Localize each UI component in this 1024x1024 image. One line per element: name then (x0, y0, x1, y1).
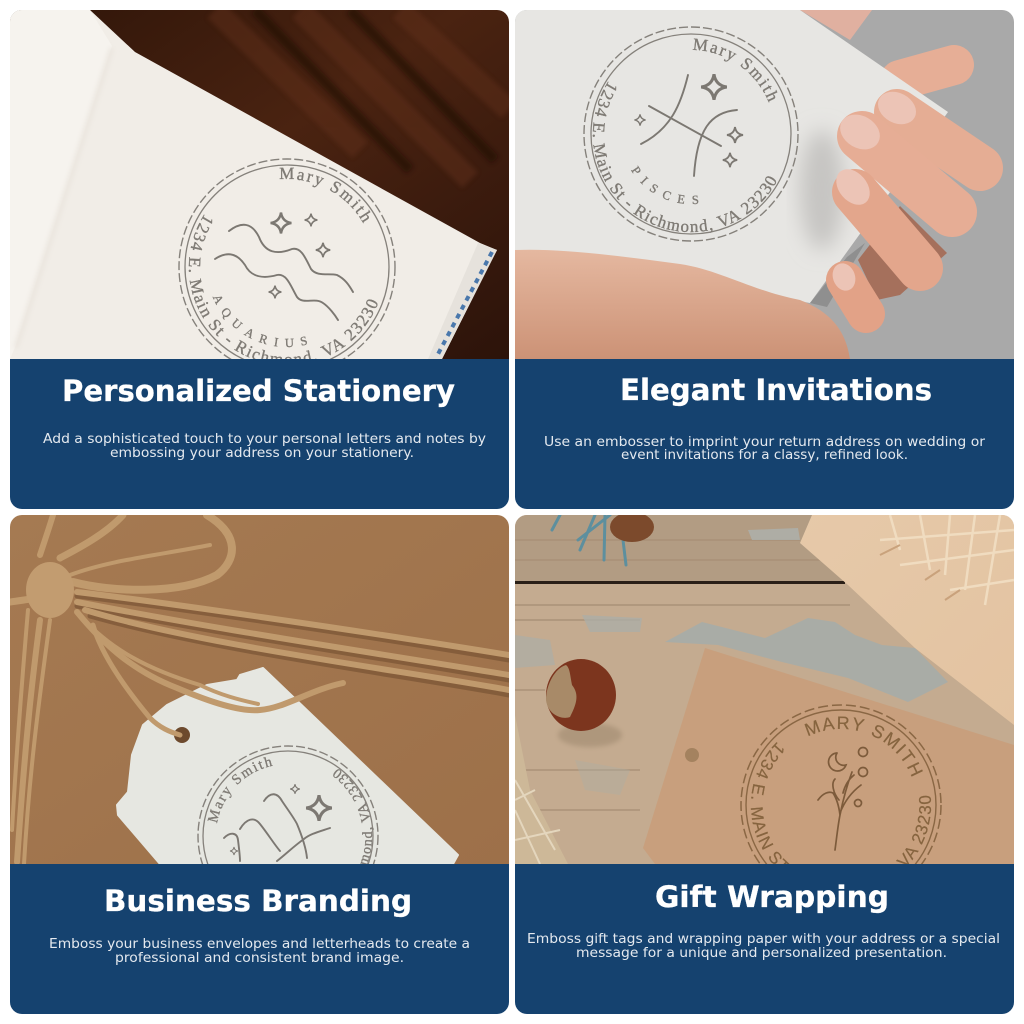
description: embossing your address on your stationery. (110, 446, 414, 461)
panel: gift wrapping (515, 515, 1014, 1014)
stamp: pisces: Mary Smith (692, 38, 778, 102)
stamp: floral: 1234 E. MAIN ST - RICHMOND, VA 23230 (750, 742, 932, 864)
description (43, 432, 486, 461)
photo: twine-tied kraft envelope with white tag (10, 515, 509, 864)
stamp: aquarius: Mary Smith (280, 168, 370, 224)
stamp: virgo (197, 745, 379, 864)
description: Emboss gift tags and wrapping paper with your address or a special (527, 932, 1000, 947)
stamp: aquarius: AQUARIUS (212, 296, 307, 348)
description: message for a unique and personalized presentation. (576, 946, 947, 961)
photo: open book on wood with aquarius embossing (10, 10, 509, 359)
description: event invitations for a classy, refined look. (621, 448, 908, 463)
heading: Business Branding (104, 884, 412, 918)
panel: personalized stationery (10, 10, 509, 509)
description (527, 932, 1000, 961)
stamp: floral: MARY SMITH (804, 716, 923, 776)
description: professional and consistent brand image. (115, 951, 404, 966)
description (49, 937, 470, 966)
heading: Personalized Stationery (62, 374, 455, 408)
caption band (515, 864, 1014, 1014)
twine (10, 515, 509, 864)
stamp: virgo: 1234 E. Main St - Richmond, VA 23230 (333, 769, 374, 864)
stamp: virgo: Mary Smith (208, 757, 273, 824)
stamp: pisces: 1234 E. Main St - Richmond, VA 23230 (592, 82, 776, 233)
description (544, 435, 986, 463)
description: Use an embosser to imprint your return address on wedding or (544, 435, 986, 450)
description: Add a sophisticated touch to your personal letters and notes by (43, 432, 486, 447)
stamp: pisces (583, 26, 799, 242)
caption band (10, 864, 509, 1014)
stamp: pisces: PISCES (631, 166, 698, 204)
description: Emboss your business envelopes and letterheads to create a (49, 937, 470, 952)
panel: business branding (10, 515, 509, 1014)
heading: Gift Wrapping (655, 880, 889, 914)
panel: elegant invitations (515, 10, 1014, 509)
stamp: aquarius (178, 158, 396, 359)
hand fingers (829, 85, 980, 314)
heading: Elegant Invitations (620, 373, 932, 407)
stamp: aquarius: 1234 E. Main St - Richmond, VA 23230 (188, 214, 378, 359)
photo: kraft gift tag on rustic wood with hazelnut (515, 515, 1014, 864)
stamp: floral (740, 704, 942, 864)
caption band (515, 359, 1014, 509)
caption band (10, 359, 509, 509)
photo: hands holding card with pisces embossing (515, 10, 1014, 359)
